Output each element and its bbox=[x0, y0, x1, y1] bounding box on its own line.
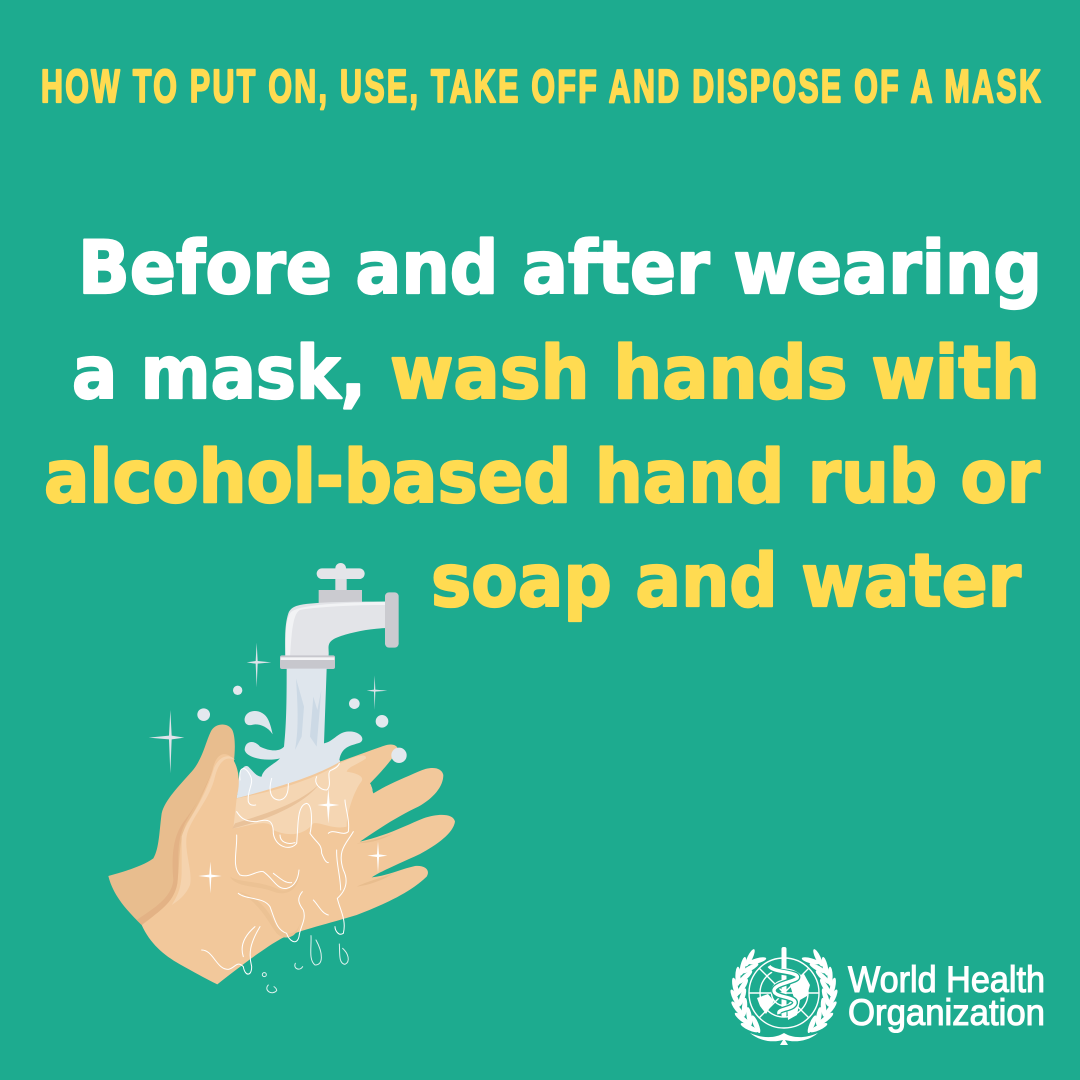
icon: front hand bbox=[142, 744, 455, 984]
icon: water drops below hands bbox=[262, 936, 348, 993]
icon: hand shading bbox=[137, 756, 393, 937]
icon: back hand bbox=[108, 724, 240, 925]
title: HOW TO PUT ON, USE, TAKE OFF AND DISPOSE OF A MASK bbox=[41, 62, 1041, 113]
icon: faucet bbox=[280, 563, 399, 669]
icon: water trickles on hands bbox=[202, 763, 353, 974]
logo wordmark: World Health bbox=[848, 959, 1045, 1000]
main message bbox=[44, 226, 1042, 624]
laurel leaves bbox=[729, 948, 839, 1045]
logo wordmark: Organization bbox=[848, 992, 1045, 1033]
main message: wash hands with bbox=[390, 331, 1040, 416]
logo: World Health Organization bbox=[729, 947, 1045, 1045]
icon: water stream and splash bbox=[237, 669, 373, 817]
logo wordmark bbox=[848, 959, 1045, 1033]
icon: WHO emblem bbox=[729, 947, 839, 1045]
main message: a mask, bbox=[72, 331, 366, 416]
icon: sparkles bbox=[149, 643, 387, 893]
icon: bubbles bbox=[197, 686, 407, 763]
main message: soap and water bbox=[431, 539, 1021, 624]
illustration: hands washing under a tap bbox=[108, 563, 455, 993]
